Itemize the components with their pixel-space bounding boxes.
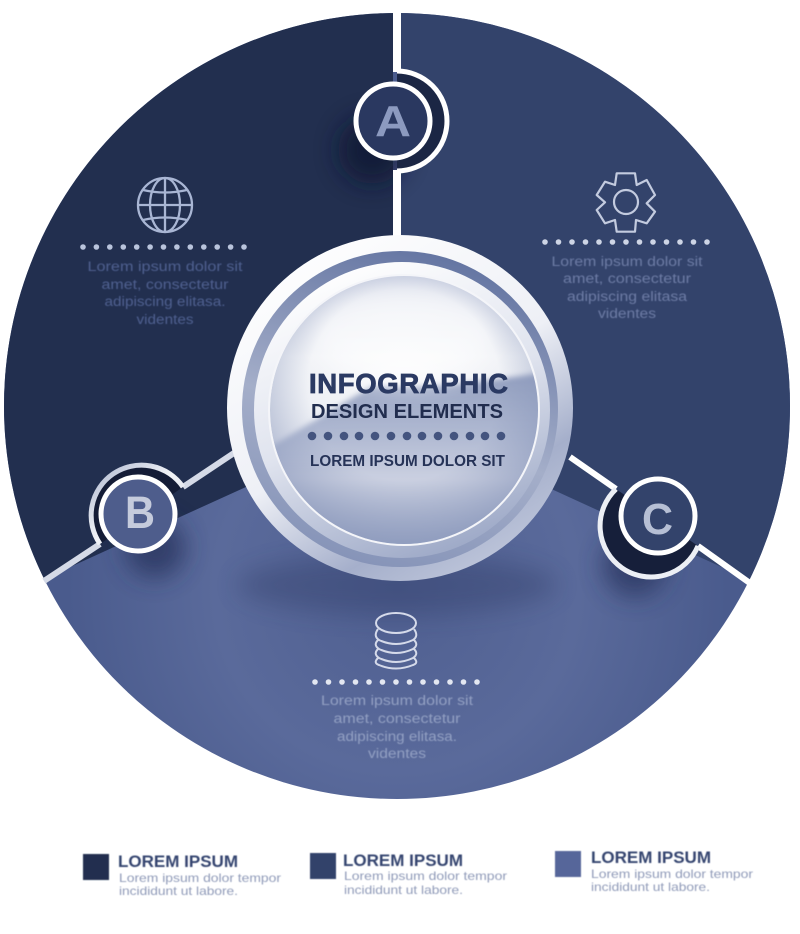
center disc (227, 235, 573, 581)
icon: database (376, 613, 416, 668)
shadow: badge A (338, 116, 406, 184)
text: bottom: amet, consectetur (334, 711, 461, 726)
legend: item 3: LOREM IPSUM (591, 849, 711, 867)
legend: item 2 (310, 852, 507, 897)
badge C: C (642, 495, 673, 544)
legend: item 2: Lorem ipsum dolor tempor (344, 869, 507, 883)
disc title: INFOGRAPHIC (309, 368, 508, 399)
legend: item 1: Lorem ipsum dolor tempor (119, 871, 281, 885)
dots: bottom (312, 679, 480, 685)
legend: item 1 (83, 853, 281, 898)
text: left (88, 259, 243, 327)
badge A: A (375, 97, 411, 146)
text: left: videntes (136, 312, 194, 327)
segment: right (401, 13, 790, 580)
seam: top (393, 8, 401, 250)
legend: item 1: LOREM IPSUM (118, 853, 238, 871)
text: right: amet, consectetur (563, 271, 692, 286)
disc tagline: LOREM IPSUM DOLOR SIT (310, 453, 505, 470)
seam: right (570, 457, 754, 586)
shadow: below center disc (237, 555, 557, 615)
legend: item 2: LOREM IPSUM (343, 852, 463, 870)
legend: item 3: incididunt ut labore. (591, 880, 710, 894)
shadow: badge C (603, 533, 667, 597)
text: left: Lorem ipsum dolor sit (88, 259, 243, 274)
text: left: amet, consectetur (102, 277, 229, 292)
seam: left (44, 449, 240, 581)
text: right: Lorem ipsum dolor sit (552, 254, 703, 269)
text: bottom: Lorem ipsum dolor sit (321, 693, 473, 708)
dots: right (542, 239, 710, 245)
disc subtitle: DESIGN ELEMENTS (311, 401, 503, 423)
text: right (552, 254, 703, 321)
text: bottom (321, 693, 473, 761)
disc dots (308, 432, 505, 440)
icon: globe (138, 178, 192, 232)
badge B: B (125, 487, 155, 538)
legend: item 3 (555, 849, 753, 894)
text: right: videntes (598, 306, 656, 321)
badge C (600, 479, 698, 577)
text: bottom: videntes (368, 746, 426, 761)
badge B (91, 465, 183, 551)
sphere horizon shading (270, 284, 538, 544)
legend: item 1: incididunt ut labore. (119, 884, 238, 898)
text: right: adipiscing elitasa (567, 289, 688, 304)
text: bottom: adipiscing elitasa. (337, 729, 457, 744)
dots: left (80, 244, 247, 250)
segment: left (0, 0, 393, 620)
shadow: badge B (125, 518, 185, 578)
legend: item 2: incididunt ut labore. (344, 883, 463, 897)
text: left: adipiscing elitasa. (104, 294, 226, 309)
badge A (356, 71, 447, 171)
legend: item 3: Lorem ipsum dolor tempor (591, 867, 753, 881)
icon: gear (597, 173, 655, 232)
